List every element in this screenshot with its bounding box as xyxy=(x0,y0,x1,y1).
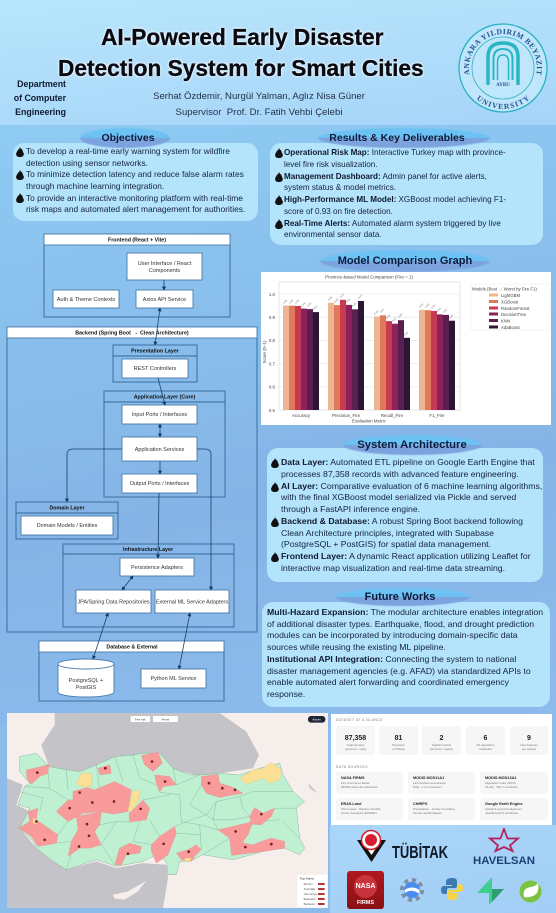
map controls: Fire risk xyxy=(135,717,146,721)
frontend group: Axios API Service xyxy=(143,297,186,303)
bar chart: model comparison: F1_Fire xyxy=(429,413,445,418)
logo: NASA FIRMS: NASA xyxy=(356,883,375,890)
frontend group: User Interface / React xyxy=(138,261,192,267)
backend group: Application Services xyxy=(135,447,185,453)
system architecture text: Data Layer: Automated ETL pipeline on Google Earth Engine that xyxy=(281,457,535,467)
chart legend: RandomForest xyxy=(501,306,530,311)
data source cards: NASA FIRMS xyxy=(341,776,364,780)
database and external group: Python ML Service xyxy=(151,676,196,682)
bar chart: model comparison: 0.93 xyxy=(424,302,431,309)
bar chart: model comparison: 0.95 xyxy=(288,298,295,305)
objectives text xyxy=(26,146,245,214)
department xyxy=(14,78,66,117)
results text: level fire risk visualization. xyxy=(284,160,378,169)
results text: Real-Time Alerts: Automated alarm system triggered by live xyxy=(284,218,501,228)
backend group: Domain Layer xyxy=(49,506,85,512)
data source cards: Spatial & temporal alignment xyxy=(485,807,522,811)
bar chart: model comparison: 0.89 xyxy=(397,312,404,319)
backend group: Output Ports / Interfaces xyxy=(130,481,190,487)
database and external group xyxy=(39,641,224,701)
system architecture text: AI Layer: Comparative evaluation of 6 machine learning algorithms, xyxy=(281,480,542,490)
title xyxy=(58,24,424,83)
data source cards: MODIS MOD13A1 xyxy=(485,776,516,780)
map controls: Alerts xyxy=(162,717,170,721)
authors and supervisor: Supervisor Prof. Dr. Fatih Vehbi Çelebi xyxy=(176,107,342,118)
stat cards: evaluated xyxy=(479,747,492,751)
data source cards: Google Earth Engine xyxy=(485,802,523,806)
results text xyxy=(284,148,506,239)
stat cards: Total samples xyxy=(347,743,364,747)
bar chart: model comparison: 0.95 xyxy=(294,298,301,305)
backend group: Presentation Layer xyxy=(131,348,179,354)
stat cards: 6 xyxy=(484,735,487,742)
stat cards: Spatial models xyxy=(432,743,451,747)
bar chart: model comparison: 0.7 xyxy=(269,362,276,366)
backend group: Input Ports / Interfaces xyxy=(132,412,187,418)
icon: Supabase xyxy=(477,877,504,905)
bar chart: model comparison: 0.6 xyxy=(269,384,276,390)
icon: Python xyxy=(441,878,463,900)
frontend group: Auth & Theme Contexts xyxy=(57,297,115,303)
red high-risk provinces xyxy=(19,752,285,865)
bar chart: model comparison: 0.95 xyxy=(333,297,340,304)
chart legend: DecisionTree xyxy=(501,312,527,317)
stat cards: (province / region) xyxy=(430,747,453,751)
stat cards: of Türkiye xyxy=(392,747,405,751)
bar chart: model comparison: Accuracy xyxy=(292,413,311,418)
sea xyxy=(7,713,318,908)
system architecture text: interactive map visualization and real-time data streaming. xyxy=(281,563,505,573)
database and external group: PostGIS xyxy=(76,685,97,691)
future works text xyxy=(267,607,543,699)
future works text: Institutional API Integration: Connecting the system to national xyxy=(267,654,516,664)
future works text: Multi-Hazard Expansion: The modular architecture enables integration xyxy=(267,607,543,617)
bar chart: model comparison: 0.95 xyxy=(282,298,289,305)
heading ellipse: results xyxy=(318,128,490,148)
authors and supervisor xyxy=(153,91,365,118)
stat cards: ML algorithms xyxy=(476,743,495,747)
backend group: Domain Models / Entities xyxy=(37,523,98,529)
system architecture text: Clean Architecture principles, integrated with Supabase xyxy=(281,528,494,538)
heading: future works: Future Works xyxy=(365,591,435,603)
stat cards: 2 xyxy=(440,735,443,742)
database and external group: Database & External xyxy=(106,644,158,650)
results text: High-Performance ML Model: XGBoost model achieving F1- xyxy=(284,195,506,204)
map legend xyxy=(297,875,327,907)
data source cards: ERA5-Land xyxy=(341,802,361,806)
future works text: modules can be incorporated by introducing domain-specific data xyxy=(267,630,518,640)
logo: HAVELSAN xyxy=(473,828,535,867)
logo: TUBITAK xyxy=(357,830,448,862)
chart legend: Models (Best → Worst by Fire F1) xyxy=(472,286,537,292)
map controls: Admin xyxy=(312,718,321,722)
future works text: disaster management agencies (e.g. AFAD) via standardized APIs to xyxy=(267,666,531,676)
system architecture text: through a FastAPI inference engine. xyxy=(281,504,420,514)
fire markers xyxy=(35,760,273,855)
panel: system architecture xyxy=(267,448,543,582)
bar chart: model comparison: 0.87 xyxy=(391,316,398,323)
stat cards: Provinces xyxy=(392,743,405,747)
data source cards: Hourly reanalysis (ECMWF) xyxy=(341,811,377,815)
yellow medium-risk provinces xyxy=(33,762,281,861)
frontend group: Frontend (React + Vite) xyxy=(108,238,166,244)
data sources heading: DATA SOURCES xyxy=(336,765,368,769)
bar chart: model comparison: 0.93 xyxy=(418,302,425,309)
authors and supervisor: Serhat Özdemir, Nurgül Yalman, Aglız Nisa Güner xyxy=(153,91,365,102)
map controls xyxy=(131,716,325,723)
bar chart: model comparison: 0.93 xyxy=(306,301,313,308)
future works text: of additional disaster types. Earthquake, flood, and drought prediction xyxy=(267,619,534,629)
icon: university logo: AYBU xyxy=(496,83,510,88)
title: AI-Powered Early Disaster xyxy=(101,24,383,50)
data source cards: MODIS active fire detections xyxy=(341,785,378,789)
bar chart: model comparison: Province-based Model Comparison (Fire = 1) xyxy=(325,274,413,280)
bar chart: model comparison: 0.93 xyxy=(351,301,358,308)
icon: objective bullets xyxy=(16,147,24,203)
backend group: Application Layer (Core) xyxy=(134,394,195,400)
map legend: Tekirdağ xyxy=(304,887,315,891)
backend group: Backend (Spring Boot - Clean Architecture) xyxy=(75,330,189,336)
data source cards: Wind speed · Relative humidity xyxy=(341,807,381,811)
footer background xyxy=(330,825,556,913)
bar chart: model comparison: Score (0–1) xyxy=(262,340,267,363)
stat cards xyxy=(336,726,548,755)
bar chart: model comparison: 0.88 xyxy=(448,313,455,320)
backend group: External ML Service Adapters xyxy=(156,600,228,606)
panel: future works xyxy=(262,602,550,707)
icon: university logo xyxy=(458,23,548,113)
bar chart: model comparison: 0.9 xyxy=(269,315,276,320)
data source cards: CHIRPS xyxy=(413,802,427,806)
map legend: Top Alerts xyxy=(300,876,314,880)
body background xyxy=(0,125,556,725)
chart legend: LightGBM xyxy=(501,293,521,298)
panel: objectives xyxy=(13,143,258,221)
Turkey provinces base xyxy=(18,753,305,875)
heading: results: Results & Key Deliverables xyxy=(329,132,465,144)
backend group xyxy=(7,327,257,632)
icon: university logo: UNIVERSITY xyxy=(478,95,529,109)
chart legend: KNN xyxy=(501,318,510,324)
logo: HAVELSAN: HAVELSAN xyxy=(473,855,535,867)
stat cards: (province × day) xyxy=(345,747,366,751)
system architecture text: Backend & Database: A robust Spring Boot backend following xyxy=(281,516,523,526)
architecture diagram xyxy=(6,234,258,702)
chart legend: AdaBoost xyxy=(501,325,520,330)
icon: Spring xyxy=(520,880,542,902)
bar chart: model comparison: 0.90 xyxy=(373,309,380,316)
results text: Management Dashboard: Admin panel for active alerts, xyxy=(284,172,487,180)
backend group: JPA/Spring Data Repositories xyxy=(77,600,150,606)
bar chart: model comparison: 0.91 xyxy=(442,307,449,314)
bar chart: model comparison: 0.96 xyxy=(327,295,334,302)
future works text: response. xyxy=(267,689,305,699)
data source cards: Fire occurrence labels xyxy=(341,781,369,785)
stat cards: 87,358 xyxy=(345,735,366,742)
objectives text: through machine learning integration. xyxy=(26,181,164,191)
map: Turkey fire risk xyxy=(7,713,328,908)
objectives text: detection using sensor networks. xyxy=(26,158,148,168)
header background xyxy=(0,0,556,125)
bar chart: model comparison: 0.97 xyxy=(357,293,364,300)
icon: university logo: ANKARA YILDIRIM BEYAZIT xyxy=(464,29,542,76)
department: Engineering xyxy=(15,106,66,116)
logo: NASA FIRMS xyxy=(347,871,384,909)
bar chart: model comparison: Precision_Fire xyxy=(332,413,361,418)
bar chart: model comparison: 0.92 xyxy=(312,304,319,311)
bar chart: model comparison: 0.97 xyxy=(339,292,346,299)
chart legend xyxy=(471,284,550,330)
bar chart: model comparison: 0.94 xyxy=(300,301,307,308)
stat cards: per sample xyxy=(522,747,536,751)
data source cards: Precipitation · 14-day cumulative xyxy=(413,807,455,811)
system architecture text xyxy=(281,457,542,573)
future works text: sources while reusing the existing ML pipeline. xyxy=(267,642,446,652)
icon: results bullets xyxy=(275,148,283,229)
data source cards: Land surface temperature xyxy=(413,781,446,785)
heading: objectives: Objectives xyxy=(101,132,155,144)
bar chart: model comparison: 0.93 xyxy=(430,303,437,310)
title: Detection System for Smart Cities xyxy=(58,55,424,81)
backend group: Persistence Adapters xyxy=(131,565,183,571)
bar chart: model comparison: 0.8 xyxy=(269,338,276,343)
bar chart: model comparison xyxy=(261,272,551,425)
results text: system status & model metrics. xyxy=(284,183,396,192)
stat cards: 81 xyxy=(395,735,402,742)
arrows xyxy=(67,280,211,669)
bar chart: model comparison: 0.91 xyxy=(436,306,443,313)
map legend: Balıkesir xyxy=(304,902,315,906)
system architecture text: with the final XGBoost model serialized via Pickle and served xyxy=(281,492,516,502)
stat cards: Input features xyxy=(520,743,538,747)
icon: architecture bullets xyxy=(271,458,279,562)
panel: dataset and sources xyxy=(331,714,552,825)
data source cards: 16-day · 500 m resolution xyxy=(485,785,518,789)
stat cards: 9 xyxy=(527,735,531,742)
department: Department xyxy=(17,78,66,88)
results text: environmental sensor data. xyxy=(284,230,382,239)
heading: model comparison graph: Model Comparison Graph xyxy=(338,255,472,267)
bar chart: model comparison: 0.95 xyxy=(345,297,352,304)
objectives text: To develop a real-time early warning system for wildfire xyxy=(26,146,230,156)
bar chart: model comparison: 0.91 xyxy=(379,307,386,314)
future works text: enable automated alert forwarding and coordinated emergency xyxy=(267,677,509,687)
bar chart: model comparison: Recall_Fire xyxy=(381,413,404,418)
backend group: REST Controllers xyxy=(134,366,177,372)
backend group: Infrastructure Layer xyxy=(123,547,173,553)
bar chart: model comparison: 0.81 xyxy=(403,330,410,337)
frontend group xyxy=(44,234,230,317)
bar chart: model comparison: Evaluation Metric xyxy=(352,418,387,424)
department: of Computer xyxy=(14,92,66,102)
system architecture text: Frontend Layer: A dynamic React application utilizing Leaflet for xyxy=(281,551,531,561)
frontend group: Components xyxy=(149,268,180,274)
objectives text: risk maps and automated alert management for authorities. xyxy=(26,204,245,214)
data source cards: Vegetation index (NDVI) xyxy=(485,781,516,785)
map legend: Mersin xyxy=(304,882,313,886)
data source cards: MODIS MOD11A1 xyxy=(413,776,444,780)
results text: Operational Risk Map: Interactive Turkey map with province- xyxy=(284,148,506,157)
objectives text: To provide an interactive monitoring platform with real-time xyxy=(26,193,243,203)
map legend: Eskişehir xyxy=(304,897,316,901)
map legend: Osmaniye xyxy=(304,892,317,896)
system architecture text: (PostgreSQL + PostGIS) for spatial data management. xyxy=(281,539,491,549)
dataset heading: DATASET AT A GLANCE xyxy=(336,718,383,722)
data source cards xyxy=(336,772,548,820)
panel: results xyxy=(270,143,543,245)
heading ellipse: model comparison xyxy=(320,250,490,272)
data source cards: Pentad rainfall dataset xyxy=(413,811,442,815)
data source cards: Daily · 1 km resolution xyxy=(413,785,442,789)
bar chart: model comparison: 0.88 xyxy=(385,313,392,320)
icon: Google Earth Engine xyxy=(400,878,424,902)
heading: system architecture: System Architecture xyxy=(357,439,467,451)
heading ellipse: objectives xyxy=(80,128,170,148)
logo: NASA FIRMS: FIRMS xyxy=(357,900,374,906)
results text: score of 0.93 on fire detection. xyxy=(284,207,393,216)
database and external group: PostgreSQL + xyxy=(69,678,103,684)
bar chart: model comparison: 1.0 xyxy=(269,292,276,297)
chart legend: XGBoost xyxy=(501,300,519,304)
objectives text: To minimize detection latency and reduce false alarm rates xyxy=(26,169,244,179)
bar chart: model comparison: 0.5 xyxy=(269,408,276,413)
system architecture text: processes 87,358 records with advanced feature engineering. xyxy=(281,469,519,479)
data source cards: JavaScript ETL workflows xyxy=(485,811,518,815)
heading ellipse: future works xyxy=(335,588,470,606)
heading ellipse: system architecture xyxy=(343,435,482,455)
